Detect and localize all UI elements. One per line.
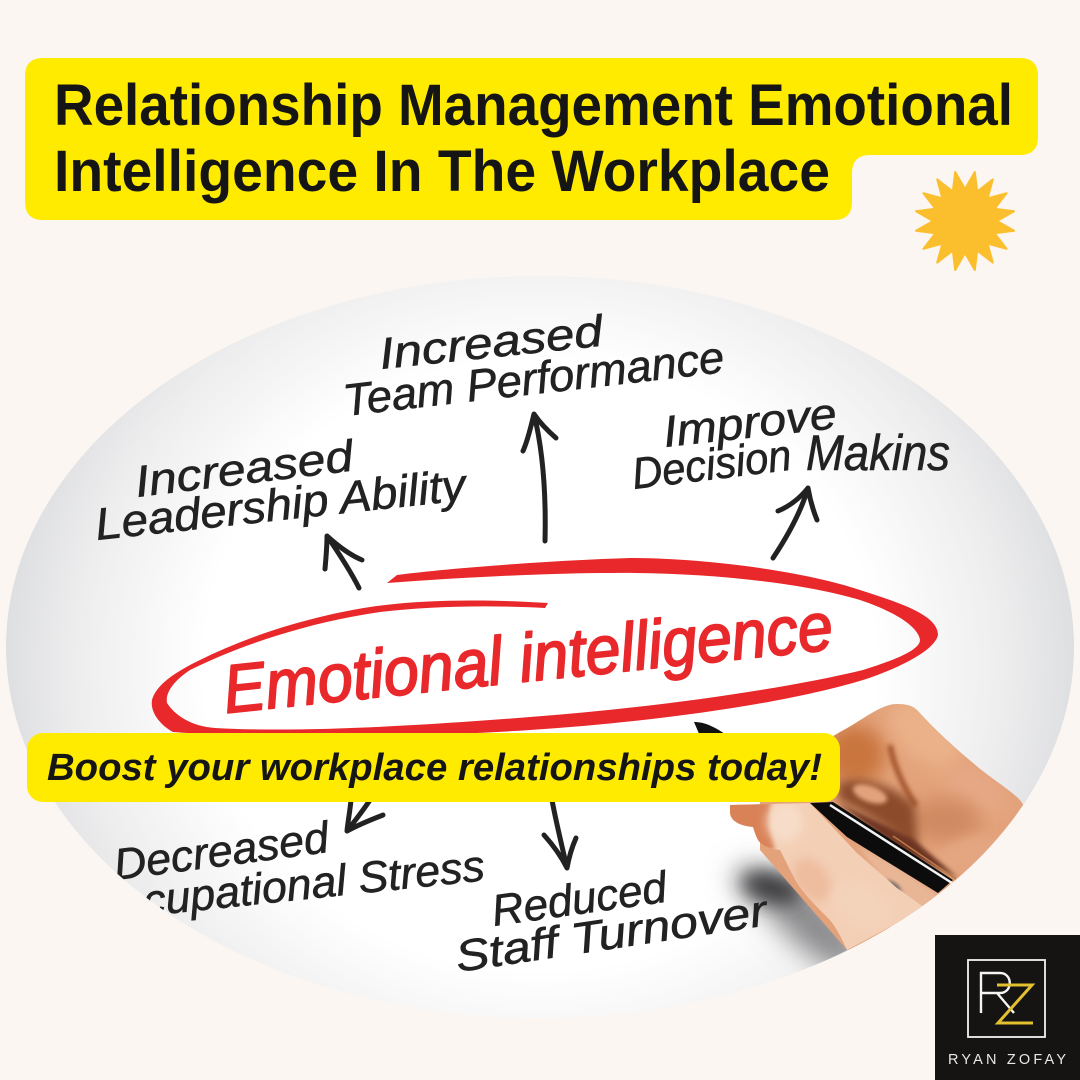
thumb and index finger bbox=[730, 803, 922, 950]
heading: improve decision making bbox=[635, 405, 950, 490]
pen barrel bbox=[810, 802, 953, 893]
heading: increased team performance: Team Performance bbox=[340, 331, 727, 426]
logo: Ryan Zofay bbox=[935, 935, 1080, 1080]
arrow: up to decision making bbox=[773, 488, 817, 558]
arrow: up to team performance bbox=[523, 414, 556, 541]
arrow: up to leadership bbox=[325, 536, 362, 588]
callout banner: Boost your workplace relationships today! bbox=[47, 747, 822, 789]
heading: increased leadership ability: Increased bbox=[132, 431, 357, 507]
heading: reduced staff turnover: Staff Turnover bbox=[452, 886, 773, 982]
icon: sun burst bbox=[916, 172, 1014, 270]
heading: reduced staff turnover: Reduced bbox=[489, 863, 671, 936]
heading: improve decision making: Makins bbox=[806, 425, 950, 481]
heading: increased team performance: Increased bbox=[377, 307, 607, 379]
heading: improve decision making: Decision bbox=[629, 431, 794, 499]
heading: reduced staff turnover bbox=[458, 869, 767, 971]
heading: increased leadership ability: Leadership Ability bbox=[93, 459, 471, 550]
title panel: Intelligence In The Workplace bbox=[54, 139, 830, 204]
heading: emotional intelligence: Emotional intelligence bbox=[220, 588, 836, 728]
arrow: down to staff turnover bbox=[544, 800, 576, 868]
logo: Ryan Zofay: RYAN ZOFAY bbox=[948, 1052, 1066, 1068]
hand shadow bbox=[735, 867, 863, 975]
heading: improve decision making: Improve bbox=[661, 389, 839, 457]
heading: decreased occupational stress: Decreased bbox=[111, 813, 333, 890]
heading: increased leadership ability bbox=[98, 438, 467, 540]
palm and fingers bbox=[760, 704, 1024, 950]
arrow: down to occupational stress bbox=[347, 800, 383, 831]
heading: decreased occupational stress: Occupational Stress bbox=[84, 841, 487, 932]
oval whiteboard photo bbox=[0, 270, 1080, 1030]
title panel bbox=[25, 58, 1038, 220]
pen tip bbox=[694, 722, 724, 733]
title panel: Relationship Management Emotional bbox=[54, 73, 1013, 138]
heading: decreased occupational stress bbox=[117, 820, 484, 921]
callout banner bbox=[27, 733, 840, 802]
hand holding pen bbox=[730, 704, 1024, 950]
red hand-drawn circle bbox=[152, 558, 938, 736]
